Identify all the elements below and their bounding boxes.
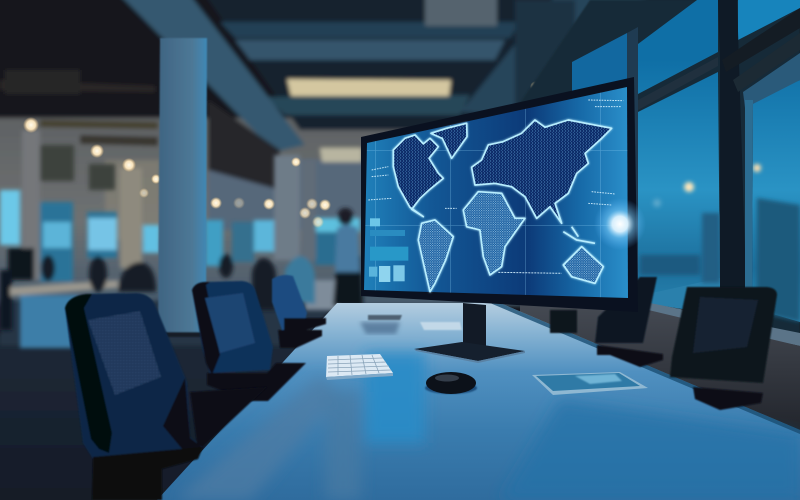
keyboard xyxy=(326,354,393,380)
warm wall glow xyxy=(105,160,160,240)
ceiling lights xyxy=(287,79,451,162)
monitor xyxy=(361,77,646,312)
lens flare xyxy=(594,198,646,250)
dashboard widgets on screen xyxy=(369,218,408,282)
hanging lamps xyxy=(23,81,542,228)
structural column xyxy=(158,38,207,337)
monitor stand xyxy=(414,303,525,363)
office chair: second left xyxy=(192,281,306,401)
ceiling beams xyxy=(0,0,650,190)
Southeast Asia islands xyxy=(563,227,595,243)
screen xyxy=(364,87,628,298)
distant skyline xyxy=(640,164,800,322)
right ceiling xyxy=(205,0,700,130)
far office: windows, screens and people xyxy=(0,130,363,348)
Eurasia xyxy=(472,120,612,223)
right windows xyxy=(515,0,800,432)
window sill and lower wall xyxy=(640,301,800,346)
tablet xyxy=(532,372,648,395)
mouse xyxy=(425,372,477,394)
office chair: right near xyxy=(670,287,777,410)
Australia xyxy=(563,247,603,283)
office chair: right far xyxy=(550,277,663,367)
conference table xyxy=(157,303,800,500)
window mullions xyxy=(627,27,638,310)
desk xyxy=(20,295,78,348)
table light reflections xyxy=(175,353,800,500)
South America xyxy=(418,220,453,292)
map caption lines xyxy=(368,100,623,273)
office chair: third left xyxy=(272,275,326,348)
office chair: front left xyxy=(65,293,267,500)
Greenland xyxy=(431,123,467,158)
world map xyxy=(368,100,623,292)
North America xyxy=(393,135,443,217)
background people xyxy=(41,208,363,310)
Africa xyxy=(463,192,525,275)
